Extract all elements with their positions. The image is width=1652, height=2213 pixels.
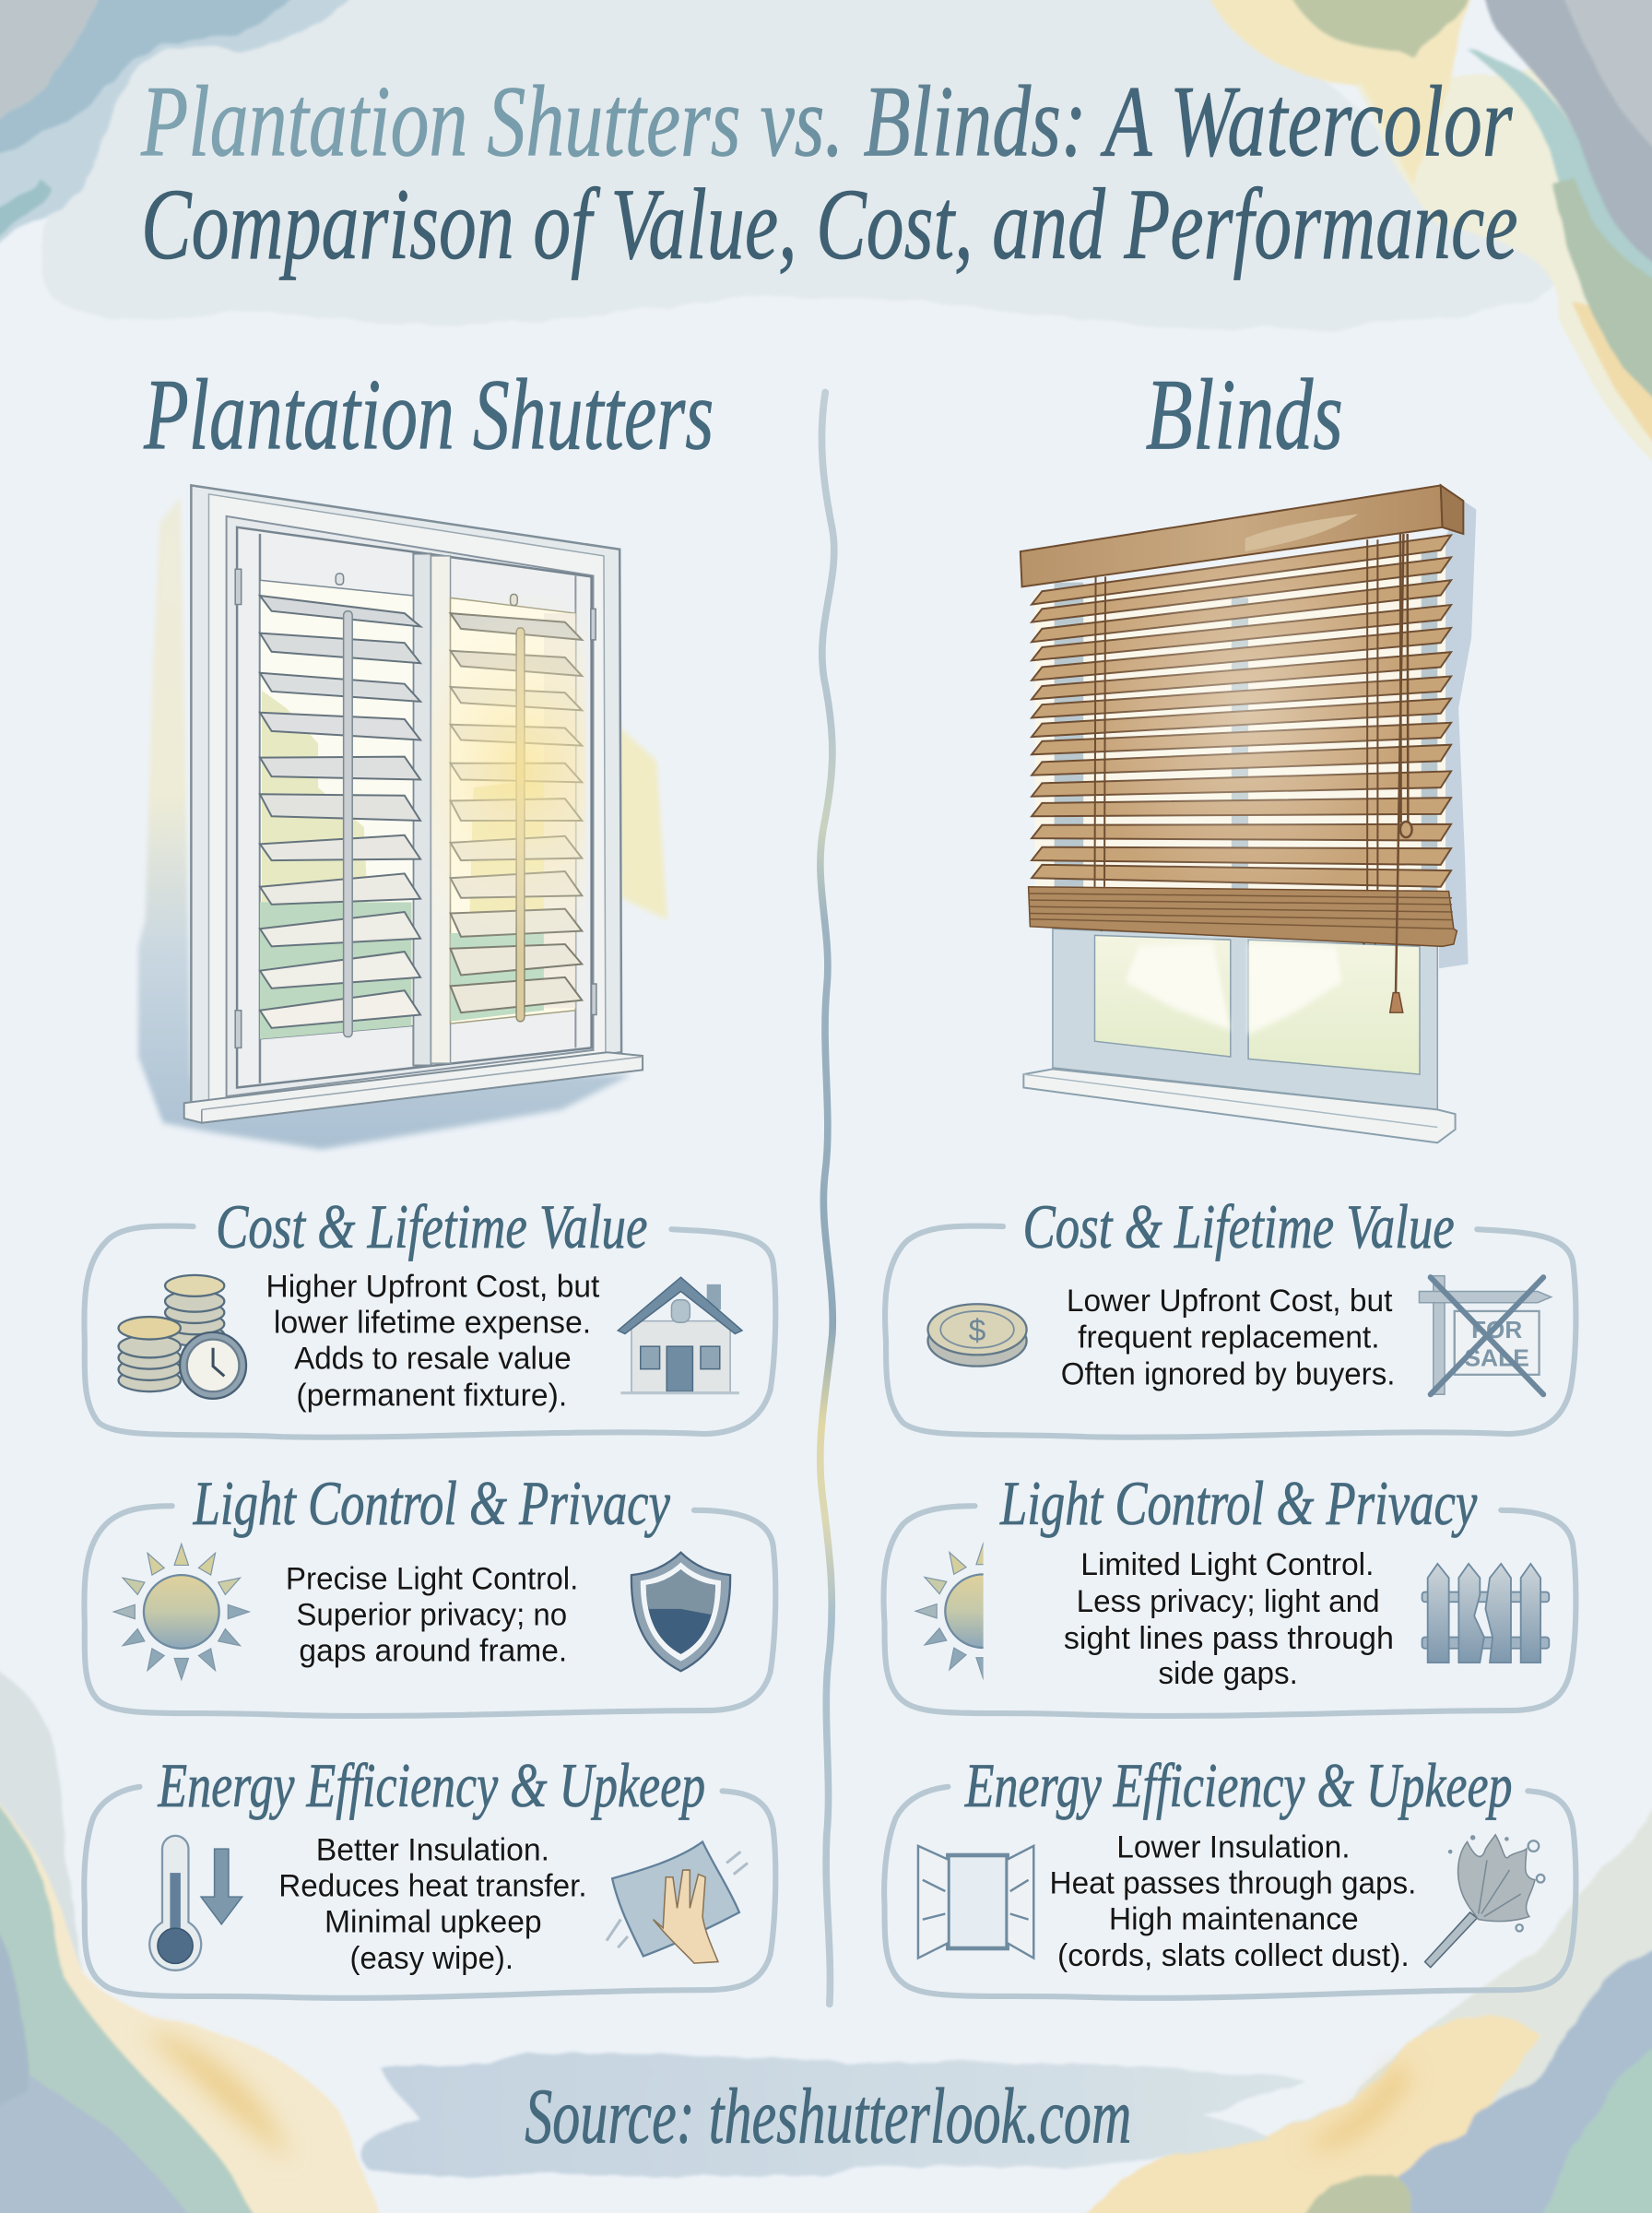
icon: half sun bbox=[914, 1542, 984, 1680]
watercolor washes: top band behind the title bbox=[41, 0, 1564, 330]
body text: lower lifetime expense. bbox=[274, 1306, 591, 1341]
panel: shutters light control and privacy bbox=[84, 1469, 775, 1716]
icon: crossed out for sale sign: FOR bbox=[1471, 1316, 1522, 1343]
icon: dollar coin bbox=[927, 1304, 1027, 1367]
body text: Lower Upfront Cost, but bbox=[1067, 1284, 1393, 1319]
icon: thermometer and down arrow bbox=[149, 1836, 242, 1970]
body text bbox=[266, 1270, 600, 1413]
body text: Lower Insulation. bbox=[1116, 1829, 1351, 1864]
body text: Adds to resale value bbox=[294, 1342, 572, 1377]
body text bbox=[278, 1832, 587, 1976]
source band wash bbox=[363, 2053, 1305, 2176]
icon: shield bbox=[631, 1553, 730, 1671]
body text: Reduces heat transfer. bbox=[278, 1868, 587, 1903]
body text: (easy wipe). bbox=[350, 1941, 513, 1976]
body text: Minimal upkeep bbox=[324, 1904, 542, 1939]
body text: Limited Light Control. bbox=[1080, 1547, 1375, 1582]
body text: frequent replacement. bbox=[1078, 1320, 1380, 1355]
panel heading: Cost & Lifetime Value bbox=[1022, 1192, 1455, 1261]
column heading: plantation shutters: Plantation Shutters bbox=[143, 359, 714, 471]
center divider bbox=[820, 393, 834, 2004]
title bbox=[140, 65, 1518, 280]
body text: Heat passes through gaps. bbox=[1050, 1865, 1416, 1900]
icon: coins and clock bbox=[119, 1275, 246, 1399]
icon: feather duster bbox=[1425, 1835, 1544, 1968]
watercolor pigment streak: bottom left bbox=[148, 2030, 289, 2160]
body text: sight lines pass through bbox=[1064, 1621, 1394, 1656]
watercolor washes: top right corner bbox=[1197, 0, 1652, 487]
column heading: blinds: Blinds bbox=[1146, 359, 1343, 471]
body text: (permanent fixture). bbox=[296, 1378, 567, 1413]
body text: Precise Light Control. bbox=[286, 1561, 578, 1596]
watercolor washes: bottom left corner bbox=[0, 1658, 392, 2213]
panel heading: Light Control & Privacy bbox=[999, 1469, 1477, 1538]
watercolor washes: top left corner bbox=[0, 0, 367, 254]
body text bbox=[1061, 1284, 1395, 1392]
body text: Often ignored by buyers. bbox=[1061, 1357, 1395, 1392]
body text: gaps around frame. bbox=[299, 1634, 567, 1669]
body text: Less privacy; light and bbox=[1077, 1584, 1380, 1619]
illustration: plantation shutters window bbox=[138, 485, 667, 1149]
icon: house bbox=[618, 1277, 742, 1393]
body text: side gaps. bbox=[1158, 1656, 1298, 1691]
body text bbox=[286, 1561, 578, 1669]
panel: blinds energy efficiency and upkeep bbox=[884, 1751, 1575, 1998]
body text: (cords, slats collect dust). bbox=[1057, 1938, 1410, 1973]
illustration: wood blinds window bbox=[1021, 485, 1476, 1142]
source footer: Source: theshutterlook.com bbox=[525, 2072, 1131, 2160]
icon: sun bbox=[113, 1544, 249, 1679]
body text: Higher Upfront Cost, but bbox=[266, 1270, 600, 1305]
panel heading: Energy Efficiency & Upkeep bbox=[158, 1751, 705, 1820]
icon: open window bbox=[918, 1846, 1033, 1959]
panel: shutters energy efficiency and upkeep bbox=[84, 1751, 775, 1998]
panel: shutters cost and lifetime value bbox=[84, 1192, 775, 1438]
watercolor pigment streak: bottom right bbox=[1305, 2064, 1410, 2148]
watercolor washes: bottom right corner bbox=[1061, 1781, 1652, 2213]
icon: dollar coin: $ bbox=[969, 1314, 986, 1348]
body text: Superior privacy; no bbox=[296, 1597, 567, 1633]
body text bbox=[1050, 1829, 1416, 1973]
icon: crossed out for sale sign: SALE bbox=[1464, 1344, 1529, 1372]
panel: blinds light control and privacy bbox=[883, 1469, 1575, 1716]
icon: broken fence bbox=[1422, 1564, 1549, 1663]
icon: hand wiping with cloth bbox=[607, 1841, 748, 1963]
body text: Better Insulation. bbox=[316, 1832, 549, 1867]
panel heading: Light Control & Privacy bbox=[193, 1469, 670, 1538]
body text: High maintenance bbox=[1109, 1901, 1359, 1936]
panel: blinds cost and lifetime value bbox=[885, 1192, 1575, 1438]
icon: crossed out for sale sign bbox=[1419, 1276, 1552, 1394]
body text bbox=[1064, 1547, 1394, 1691]
panel heading: Cost & Lifetime Value bbox=[216, 1192, 647, 1261]
